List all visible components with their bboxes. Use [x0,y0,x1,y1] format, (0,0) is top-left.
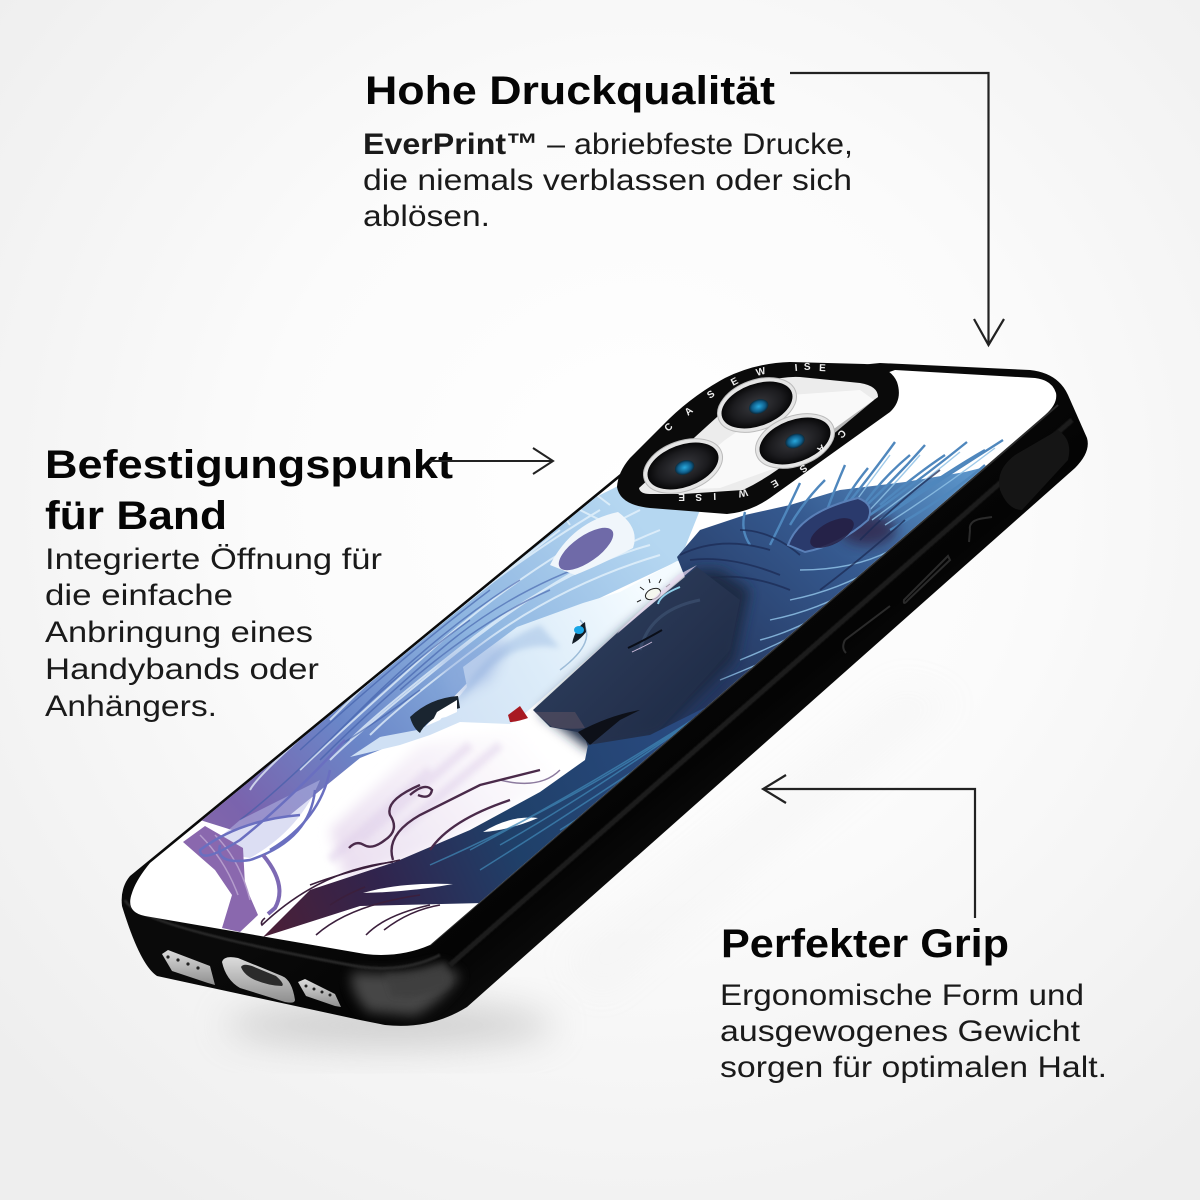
callout: Befestigungspunkt für Band: für Band [45,494,227,538]
ring text upper: S [804,362,811,373]
light lion face [350,561,697,757]
mane red shadow near ear [840,514,896,546]
printed back artwork [130,370,1056,955]
callout: Perfekter Grip: sorgen für optimalen Halt. [720,1051,1107,1084]
left lens [636,428,730,504]
heading: Hohe Druckqualität [365,69,775,113]
callout: Hohe Druckqualität [363,69,853,233]
case body [122,363,1088,1026]
callout: Hohe Druckqualität: die niemals verblassen oder sich [363,164,852,197]
ring text upper [663,362,826,434]
mane feather tips [743,440,1003,545]
bottom right speaker [298,979,341,1007]
ring text upper: E [819,363,826,374]
ring text lower: W [737,486,749,499]
camera plateau [639,377,878,494]
camera ring [617,362,899,514]
ring text upper: A [683,405,695,418]
usb-c port [222,957,295,1003]
white back [130,370,1056,955]
phone case [100,340,1100,1026]
split glow between faces [617,565,697,634]
ring text upper: C [663,421,675,434]
callout: Befestigungspunkt für Band: die einfache [45,579,233,612]
dark lion mane top [590,440,1003,750]
ring text upper: E [729,376,741,389]
plateau highlight [665,390,874,490]
ring text upper: W [755,366,767,379]
ring text lower [678,427,848,502]
arrow: top callout to phone [790,73,1004,345]
pale light rays [328,740,506,878]
description: Integrierte Öffnung für [45,543,382,576]
ring text lower: E [678,491,685,502]
side buttons [843,430,1069,653]
callout: Befestigungspunkt für Band [45,443,453,723]
arrow: grip callout to phone [763,775,975,918]
callout: Befestigungspunkt für Band: Anbringung eines [45,616,313,649]
ring text lower: E [768,476,780,489]
case side shine [125,405,1072,1016]
bottom left speaker [162,950,215,985]
ring text lower: S [695,491,702,502]
phone shadow [225,680,960,1047]
heading: Perfekter Grip [721,922,1009,966]
sun and moon mark [637,579,680,604]
light lion ear [550,512,635,578]
callout: Hohe Druckqualität: ablösen. [363,200,490,233]
arrow: strap attachment [430,448,553,474]
ring text lower: C [835,427,848,440]
ring outer [617,362,899,514]
ring text lower: S [797,462,809,475]
description: Ergonomische Form und [720,979,1084,1012]
light lion eye [572,622,586,644]
heading: Befestigungspunkt [45,443,453,487]
ring text upper: S [705,388,717,401]
light lion mouth [410,696,528,733]
dark lion head [533,567,750,752]
callout: Perfekter Grip [720,922,1107,1084]
callout: Befestigungspunkt für Band: Anhängers. [45,690,217,723]
light mane purple tail [183,740,345,932]
ring text lower: A [815,442,827,455]
top lens [710,367,804,443]
ring text lower: I [713,490,716,501]
callout: Befestigungspunkt für Band: Handybands oder [45,653,319,686]
dark lion ear [788,498,870,554]
light lion mane [200,470,700,830]
dark lion lower mane [260,707,706,936]
ring text upper: I [794,363,798,374]
description: EverPrint™ – abriebfeste Drucke, [363,128,853,161]
callout: Perfekter Grip: ausgewogenes Gewicht [720,1015,1081,1048]
curling hair strands [349,770,540,860]
right lens [748,403,842,479]
